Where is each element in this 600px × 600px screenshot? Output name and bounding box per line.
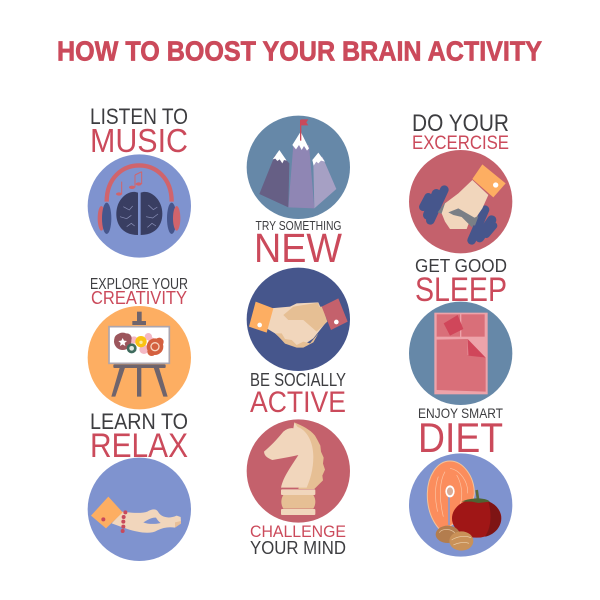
panel: be socially active [247,268,350,419]
panel: challenge your mind [247,419,350,558]
heading: get good sleep: GET GOOD [415,256,507,276]
icon: relaxed hand with bracelet [88,458,191,561]
heading: be socially active: ACTIVE [250,386,346,419]
heading: get good sleep [415,256,507,309]
panel: get good sleep [409,256,512,405]
panel: try something new [247,116,350,271]
heading: learn to relax [90,409,188,465]
heading: try something new: TRY SOMETHING [256,218,342,233]
heading: challenge your mind [250,522,346,558]
panel: explore your creativity [88,276,191,409]
heading: challenge your mind: CHALLENGE [250,522,346,541]
icon: handshake [247,268,350,371]
heading: be socially active [250,370,346,419]
icon: bed from above [409,302,512,405]
panel: do your excercise [409,110,512,253]
icon: chess knight [247,419,350,523]
heading: explore your creativity: EXPLORE YOUR [90,276,188,293]
heading: learn to relax: RELAX [90,427,188,465]
heading: explore your creativity [90,276,188,308]
heading: listen to music: LISTEN TO [90,104,188,129]
icon: salmon, tomato and walnuts [409,453,512,557]
heading: get good sleep: SLEEP [415,271,507,309]
heading: do your excercise: EXCERCISE [412,133,509,154]
icon: brain with headphones [88,154,191,258]
heading: explore your creativity: CREATIVITY [91,288,187,308]
heading: be socially active: BE SOCIALLY [250,370,346,390]
heading: listen to music [90,104,188,159]
heading: challenge your mind: YOUR MIND [250,538,346,558]
title: HOW TO BOOST YOUR BRAIN ACTIVITY [57,36,542,66]
heading: do your excercise: DO YOUR [412,110,509,137]
heading: learn to relax: LEARN TO [90,409,188,434]
panel: enjoy smart diet [409,405,512,557]
panel: learn to relax [88,409,191,561]
heading: do your excercise [412,110,509,154]
icon: easel with flower painting [88,306,191,409]
heading: listen to music: MUSIC [90,122,188,159]
icon: hand lifting dumbbell [409,150,512,253]
heading: try something new: NEW [254,225,342,271]
heading: enjoy smart diet: DIET [418,414,503,461]
panel: listen to music [88,104,191,258]
heading: enjoy smart diet: ENJOY SMART [418,405,503,421]
icon: mountains with flag [247,116,350,219]
